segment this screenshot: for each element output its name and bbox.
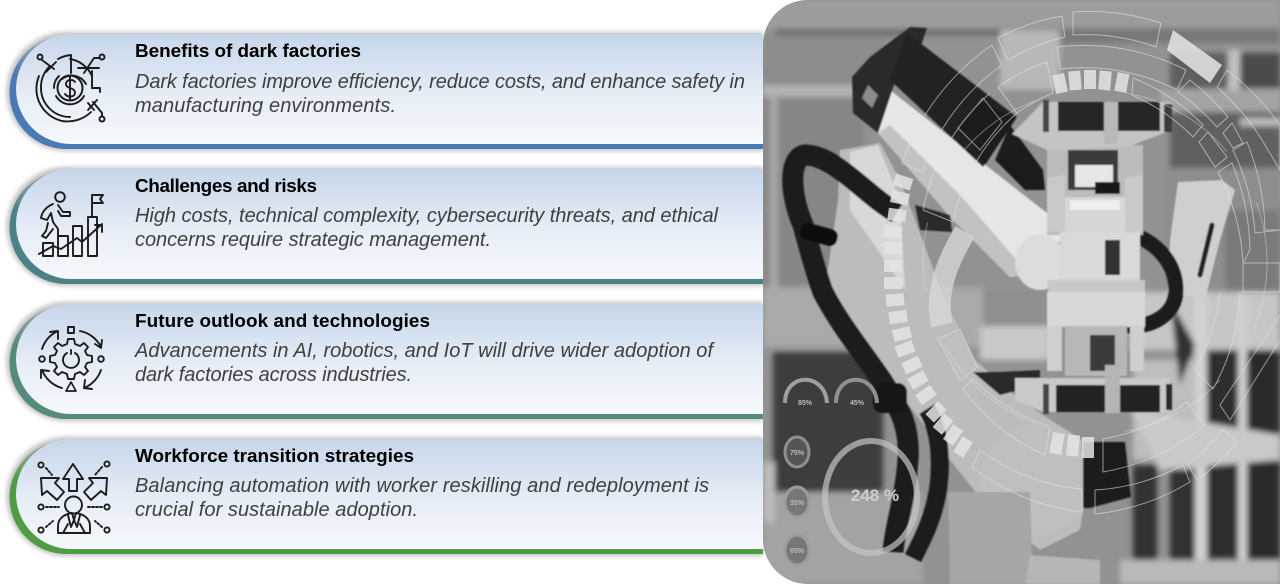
- gripper column: [1047, 145, 1143, 235]
- top gripper pad: [1012, 102, 1172, 150]
- icon: dollar target with circuit nodes: [36, 54, 104, 122]
- HUD: outlined arc segments: [902, 11, 1280, 514]
- gauges: 45%: [850, 400, 865, 407]
- text block: [134, 340, 715, 386]
- gauges: 35%: [790, 500, 805, 507]
- text block: concerns require strategic management.: [135, 229, 491, 251]
- gauges: [785, 380, 917, 565]
- text block: Dark factories improve efficiency, reduce costs, and enhance safety in: [135, 71, 745, 93]
- panel: benefits of dark factories: [7, 32, 763, 151]
- black cable hoses: [793, 155, 908, 552]
- text block: dark factories across industries.: [135, 364, 412, 386]
- gauges: 75%: [790, 450, 805, 457]
- panel: future outlook and technologies: [7, 302, 763, 421]
- HUD: inner curved band: [940, 232, 965, 325]
- text block: High costs, technical complexity, cybersecurity threats, and ethical: [135, 205, 719, 227]
- panel: robot arm photo with HUD overlay: [763, 0, 1280, 584]
- panel: challenges and risks: [7, 167, 763, 286]
- icon: gear with cycle arrows: [39, 327, 104, 391]
- gauges: 85%: [798, 400, 813, 407]
- bottom gripper pad: [1015, 378, 1170, 412]
- text block: manufacturing environments.: [135, 95, 396, 117]
- photo background: blurred factory: [763, 0, 1280, 584]
- HUD: dashed ticks along arc: [884, 70, 1129, 458]
- panel: workforce transition strategies: [7, 437, 763, 556]
- heading: Future outlook and technologies: [135, 311, 430, 332]
- text block: [135, 71, 745, 117]
- lower arm and base: [825, 143, 1085, 550]
- gauges: 65%: [790, 548, 805, 555]
- heading: Benefits of dark factories: [135, 41, 361, 62]
- text block: Balancing automation with worker reskilling and redeployment is: [135, 475, 709, 497]
- text block: crucial for sustainable adoption.: [135, 499, 418, 521]
- icon: person climbing bars to flag: [39, 192, 103, 256]
- HUD: filled light band segment: [1167, 30, 1222, 83]
- text block: Advancements in AI, robotics, and IoT will drive wider adoption of: [134, 340, 715, 362]
- text block: [135, 475, 709, 521]
- heading: Workforce transition strategies: [135, 446, 414, 467]
- white upper arm: [877, 90, 1061, 258]
- icon: person with outward arrows: [38, 461, 110, 533]
- text block: [135, 205, 719, 251]
- heading: Challenges and risks: [135, 176, 317, 197]
- black motor block: [852, 27, 927, 133]
- right black hose: [1122, 233, 1176, 326]
- right secondary arm: [1168, 180, 1235, 300]
- robot arm: body and gripper: [793, 27, 1235, 584]
- gauges: 248 %: [851, 486, 899, 505]
